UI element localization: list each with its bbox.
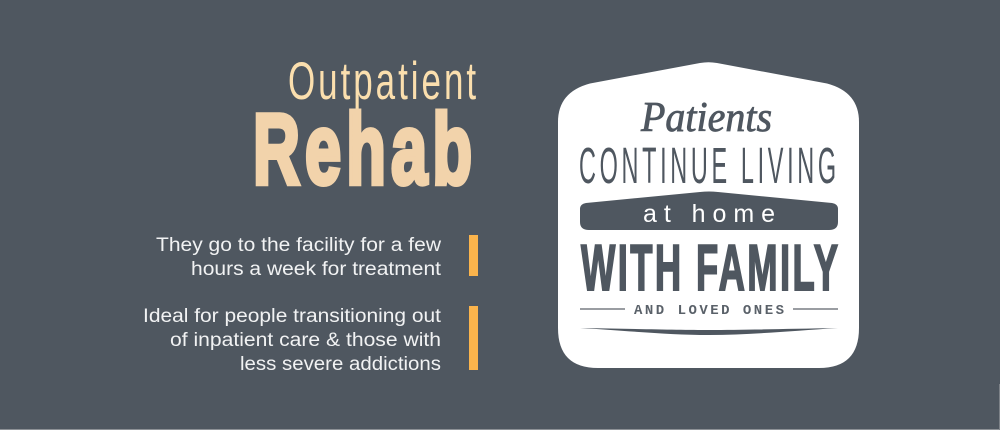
- bullet text: Ideal for people transitioning out: [143, 306, 442, 327]
- bullet text: [156, 235, 442, 280]
- badge text: Patients: Patients: [640, 95, 772, 141]
- badge shape: [558, 62, 859, 368]
- banner shape: [580, 192, 838, 230]
- badge text: with family: WITH FAMILY: [581, 232, 838, 305]
- title: [253, 51, 477, 205]
- bullet text: of inpatient care & those with: [170, 330, 441, 351]
- bullet text: They go to the facility for a few: [156, 235, 441, 256]
- swoosh underline: [580, 328, 838, 335]
- bullet text: less severe addictions: [240, 354, 441, 375]
- banner: at home: [580, 192, 838, 230]
- title line: Outpatient: Outpatient: [288, 51, 477, 111]
- bullet: facility visits: [156, 235, 478, 280]
- badge text: and loved ones with side rules: AND LOVED ONES: [634, 303, 784, 319]
- orange accent bar: [469, 306, 478, 370]
- orange accent bar: [469, 235, 478, 276]
- panel: white badge: [558, 62, 859, 368]
- bullet: ideal candidates: [143, 306, 478, 375]
- badge text: continue living: CONTINUE LIVING: [579, 138, 836, 195]
- bullet text: hours a week for treatment: [191, 259, 442, 280]
- banner text: at home: [643, 200, 775, 228]
- bullet text: [143, 306, 442, 375]
- title line: Rehab: Rehab: [253, 93, 472, 205]
